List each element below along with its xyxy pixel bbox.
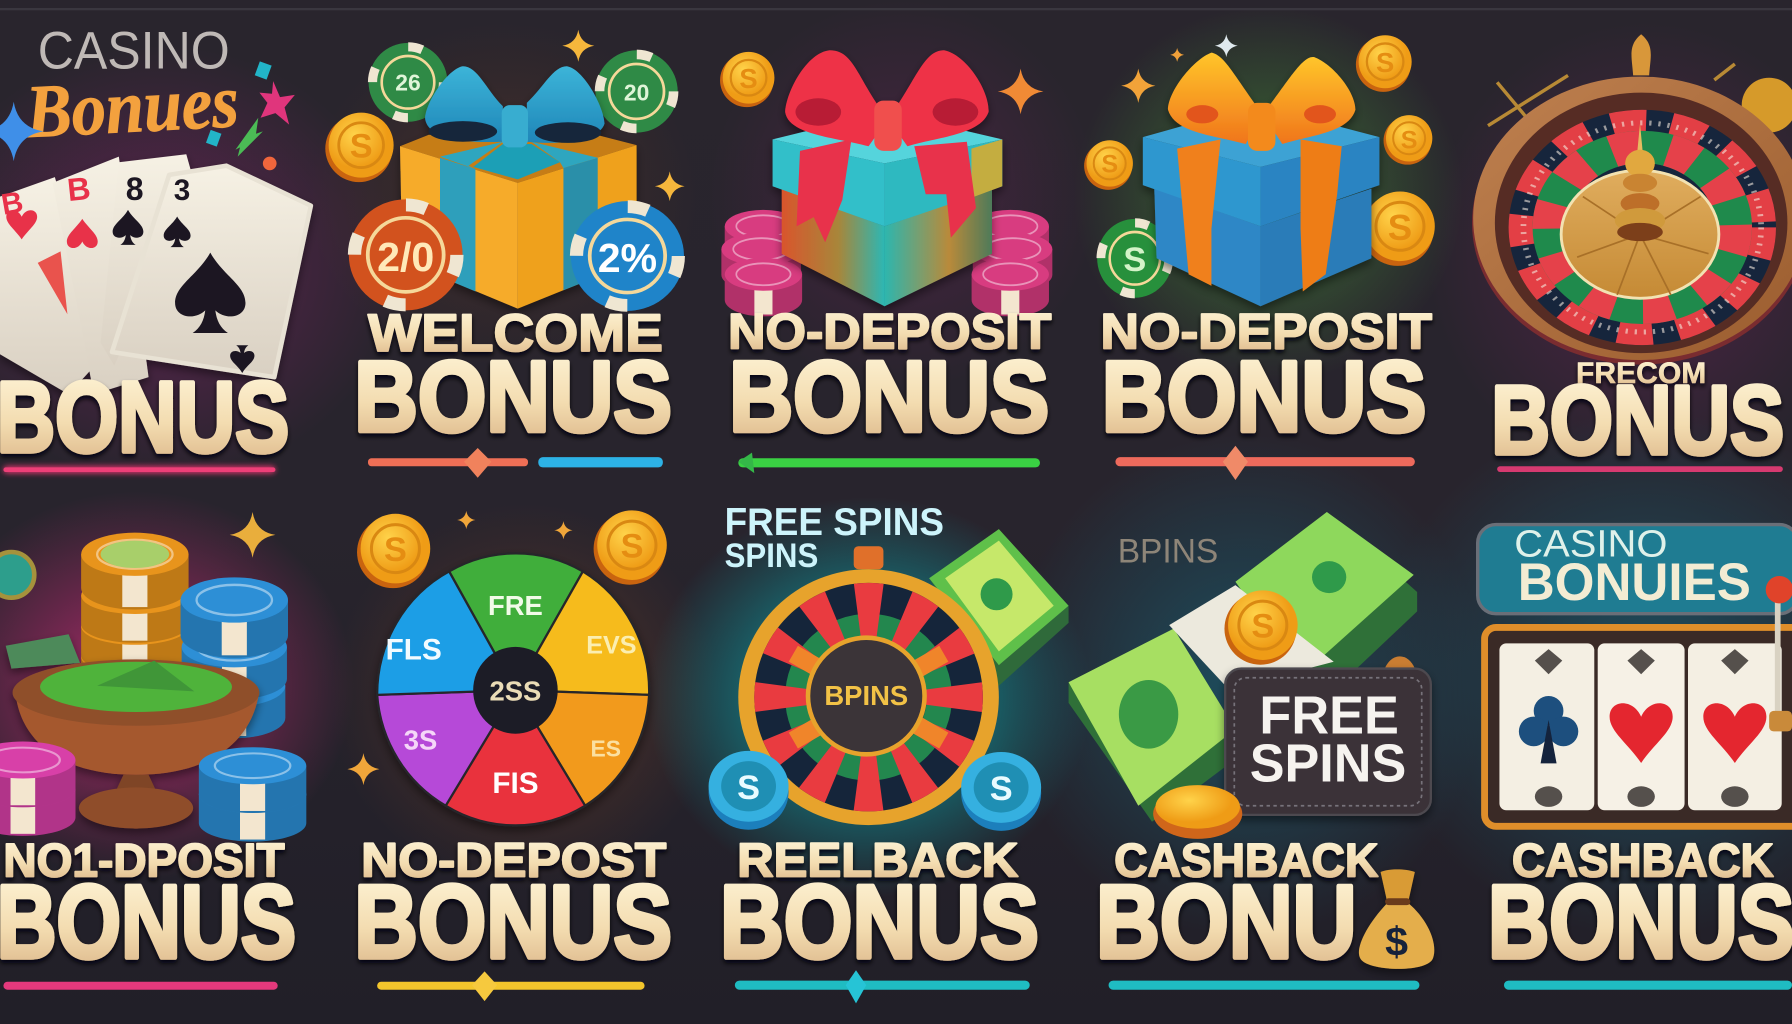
icon: coins: S [1376,47,1394,78]
chart: six-segment prize wheel: EVS [586,632,637,660]
icon: blue coins: S [990,770,1013,808]
text: casino: CASINO [1514,523,1667,565]
chart: six-segment prize wheel: 2SS [490,676,541,707]
panel: roulette bonus [1472,34,1792,475]
icon: cash stack [1069,512,1423,822]
icon: blue coins [709,751,1041,831]
text: free: FREE [1259,686,1399,746]
chart: six-segment prize wheel: 3S [404,725,437,756]
label: welcome: WELCOME [368,304,663,363]
heading: spins: SPINS [725,537,818,575]
icon: orange chip [349,199,463,310]
label: cashback: CASHBACK [1512,835,1774,887]
chart: six-segment prize wheel [377,553,649,825]
icon: coins [357,510,667,588]
icon: sparkles [562,30,685,201]
label: bonus: BONUS [0,865,296,981]
icon: sparkle [998,69,1043,114]
icon: roulette wheel [738,546,999,825]
label: bonus: BONUS [0,361,289,473]
label: bonus: BONUS [729,341,1049,453]
icon: coins: S [1101,151,1118,179]
icon: gold chip stack [81,533,189,704]
chart: six-segment prize wheel: ES [590,736,621,762]
icon: blue coins: S [737,769,760,807]
divider bar: yellow [377,971,645,1001]
text: spins: SPINS [1250,734,1406,794]
icon: gold coin: S [350,128,373,166]
icon: pink chip stacks [721,210,1052,316]
chart: six-segment prize wheel: FIS [492,767,539,800]
panel: casino bonuses cards [0,22,311,473]
icon: coin [720,52,774,107]
divider bar: cyan [1504,981,1792,990]
label: no-deposit: NO-DEPOSIT [1101,303,1432,360]
icon: lever [1766,576,1792,731]
panel: casino bonuses slot machine [1478,523,1792,990]
panel: free spins wheel [709,501,1069,1003]
label: bonus: BONUS [354,341,672,453]
icon: blue chip stack [181,577,288,738]
icon: coin: S [739,63,758,94]
panel: no-deposit orange bow gift [1084,34,1435,480]
icon: teal gift box with red ribbon [773,50,1002,306]
divider bar: pink [3,466,275,473]
label: no-depost: NO-DEPOST [361,835,666,888]
panel: no-deposit red bow gift [720,50,1052,473]
label: bonus: BONUS [720,865,1039,981]
icon: coins: S [1388,207,1412,248]
icon: orange gift box [400,66,637,309]
symbol: heart left [1610,703,1673,763]
label: cashback: CASHBACK [1114,835,1378,887]
icon: coins [1084,35,1435,266]
icon: sparkles [1121,34,1238,103]
icon: pink chip stack [0,741,75,836]
label: no1-dposit: NO1-DPOSIT [3,835,285,887]
divider bar: pink [3,982,278,990]
icon: green stuffed bowl [6,634,259,829]
icon: green chip [1097,219,1173,298]
banner: casino bonuses [1478,523,1792,614]
icon: blue gift box with orange ribbon [1143,53,1379,306]
icon: fanned playing cards: 3 [174,174,190,207]
symbol: club [1519,696,1578,763]
icon: confetti stars [0,61,295,170]
panel: cashback money wallet [1069,512,1434,990]
icon: orange chip: 2/0 [377,234,434,280]
chart: six-segment prize wheel: FLS [386,633,442,666]
panel: welcome bonus gift [325,30,685,478]
icon: blue chip [571,201,684,311]
symbols: reel tops and bottoms [1535,649,1749,807]
icon: money bag [1359,869,1434,969]
icon: slot machine [1485,627,1792,826]
icon: bottom coin [1153,785,1242,839]
label: frecom: FRECOM [1576,357,1706,390]
divider bar: orange and blue [368,448,663,478]
icon: coins: S [621,528,643,566]
icon: wallet with free spins [1225,669,1431,815]
panel: no-deposit bowl and chips [0,512,306,990]
label: bonus: BONUS [1102,341,1426,453]
icon: lower blue chip stack [199,747,306,842]
label: no-deposit: NO-DEPOSIT [728,303,1052,360]
heading: casino: CASINO [38,22,230,81]
divider bar: cyan [1109,981,1419,990]
icon: fanned playing cards [0,154,311,394]
text: bonuies: BONUIES [1518,553,1751,612]
icon: gold decorations [1488,64,1792,133]
icon: coins: S [384,531,407,569]
chart: six-segment prize wheel: FRE [488,590,543,621]
icon: cash stack: S [1251,608,1274,646]
heading: bonuses script: Bonues [23,60,241,154]
icon: roulette wheel: BPINS [824,680,908,711]
icon: fanned playing cards: B [66,170,92,208]
symbol: heart right [1703,703,1766,763]
icon: green chips [369,43,678,133]
icon: green chip: S [1123,241,1146,279]
icon: green chips: 20 [624,80,649,106]
icon: sparkles [347,511,573,785]
label: bonus: BONUS [354,865,672,981]
icon: teal gem and sparkle [0,512,275,598]
icon: gold coin [325,113,394,182]
panel: prize wheel [347,510,672,1001]
divider bar: coral [1115,446,1415,480]
icon: fanned playing cards: 8 [126,171,144,207]
divider bar: pink [1497,466,1783,472]
label: bonus: BONU [1096,865,1357,981]
heading: free spins: FREE SPINS [725,501,944,544]
label: reelback: REELBACK [737,835,1019,888]
icon: cash stack [929,529,1069,686]
icon: roulette wheel [1472,34,1792,365]
icon: coins: S [1401,127,1418,155]
icon: blue chip: 2% [598,235,657,281]
icon: green chips: 26 [395,69,421,95]
heading: bpins: BPINS [1118,532,1218,570]
divider bar: green [738,453,1040,473]
icon: money bag: $ [1385,918,1408,964]
divider bar: cyan [735,970,1030,1003]
